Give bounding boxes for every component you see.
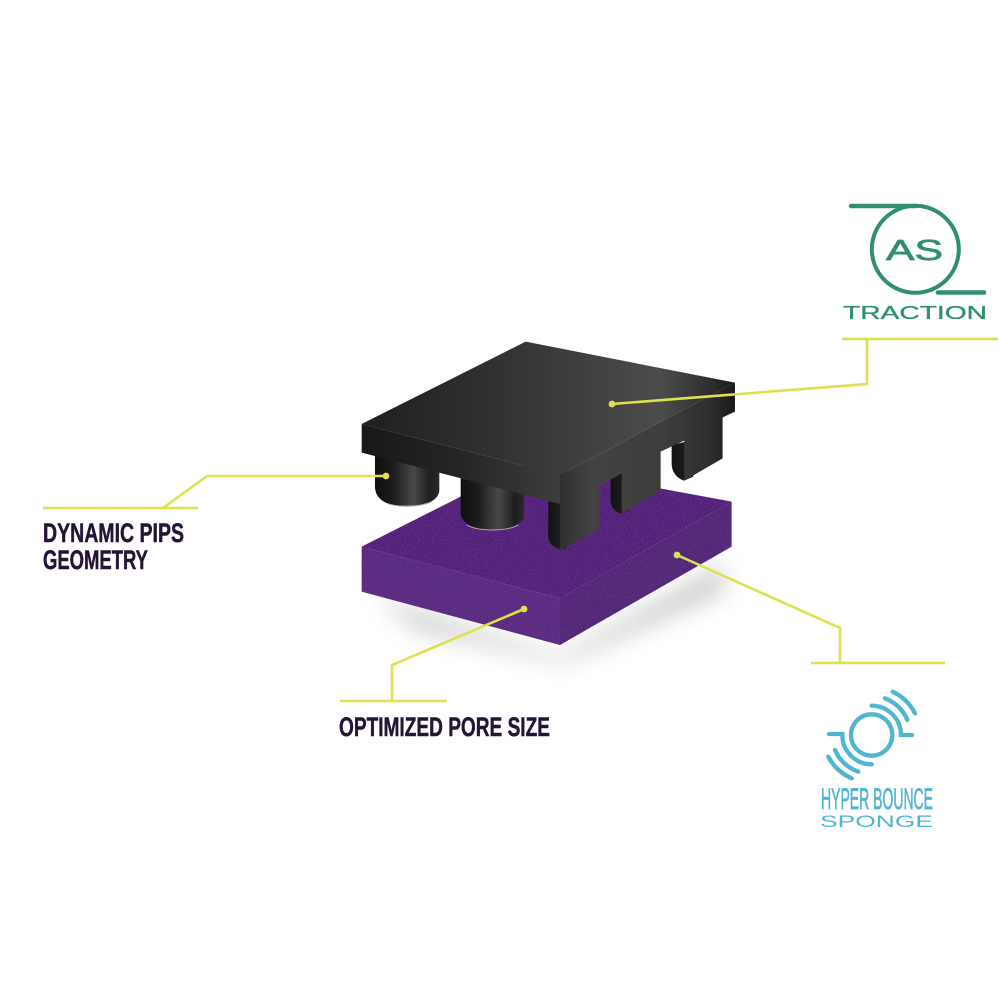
- logo text: AS: AS: [886, 235, 943, 267]
- product diagram: pip rubber over sponge: [362, 342, 735, 663]
- logo: hyper bounce sponge: [820, 692, 933, 831]
- label: dynamic pips geometry: [43, 518, 184, 575]
- callout line: AS traction: [609, 339, 998, 407]
- label: dynamic pips geometry: GEOMETRY: [43, 545, 148, 575]
- black top plate with side skirt and square pips: [362, 342, 735, 550]
- callout line: optimized pore size: [340, 606, 527, 701]
- logo text: TRACTION: TRACTION: [843, 303, 987, 323]
- icon: ring with tails: [851, 206, 984, 293]
- icon: ring with bounce arcs: [828, 692, 915, 778]
- square pips, inner faces: [548, 440, 693, 550]
- callout line: hyper bounce sponge: [674, 552, 945, 663]
- purple sponge block: [362, 463, 732, 645]
- label: dynamic pips geometry: DYNAMIC PIPS: [43, 518, 184, 548]
- cylindrical pip centre: [461, 470, 524, 530]
- label: optimized pore size: OPTIMIZED PORE SIZE: [339, 712, 550, 742]
- sponge shadow: [377, 563, 723, 663]
- logo text: SPONGE: SPONGE: [820, 812, 933, 831]
- logo: AS traction: [843, 206, 987, 323]
- callout line: dynamic pips: [43, 473, 389, 508]
- cylindrical pip left: [375, 450, 439, 507]
